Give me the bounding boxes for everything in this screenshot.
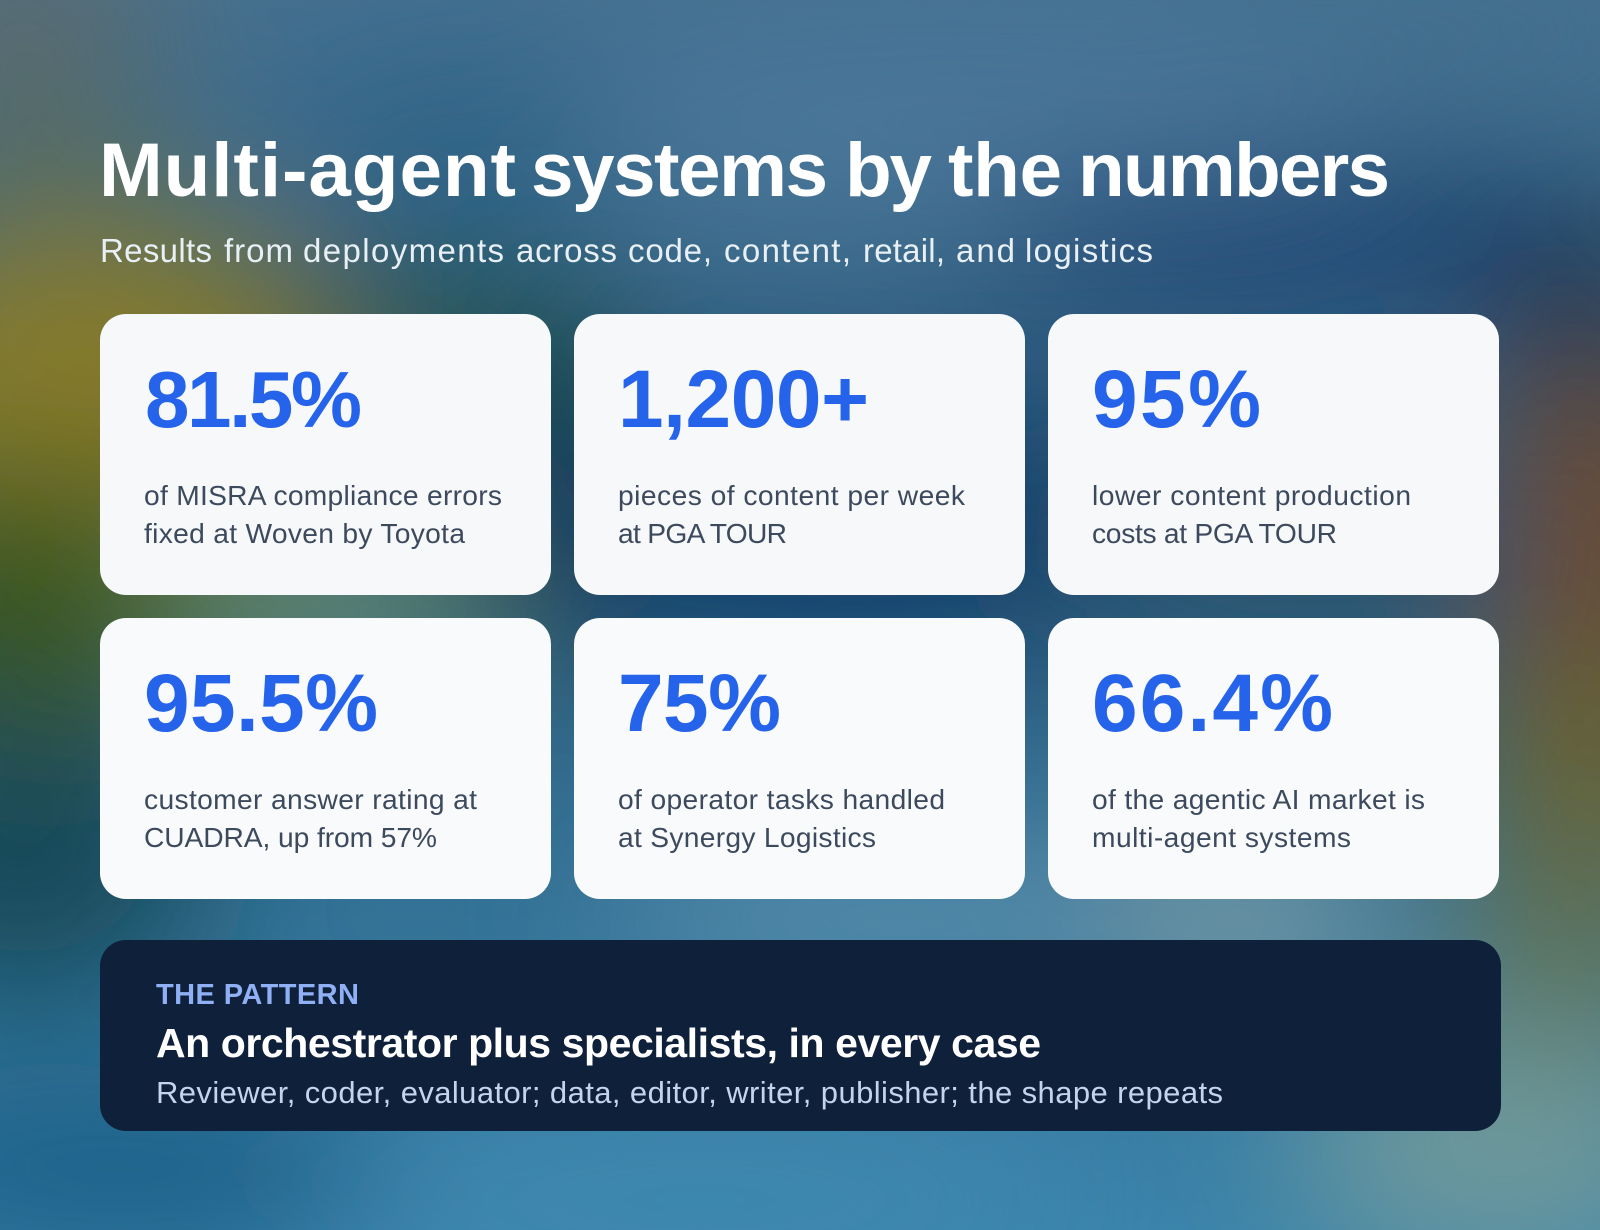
callout heading: An orchestrator plus specialists, in every case	[156, 1020, 1041, 1066]
description: operator tasks: at Synergy Logistics	[618, 821, 876, 853]
title: the	[948, 128, 1062, 213]
stat: 81.5%: 81.5%	[145, 355, 362, 444]
callout body: Reviewer, coder, evaluator; data, editor, writer, publisher; the shape repeats	[156, 1075, 1223, 1110]
description: operator tasks: of operator tasks handled	[618, 783, 945, 815]
panel: the pattern callout	[100, 940, 1501, 1131]
subtitle: deployments	[303, 232, 504, 269]
subtitle: and	[956, 232, 1015, 269]
callout label: THE PATTERN	[156, 979, 359, 1011]
title: numbers	[1078, 128, 1390, 213]
description: market share: of the agentic AI market is	[1092, 783, 1425, 815]
subtitle: across	[516, 232, 617, 269]
subtitle: logistics	[1025, 232, 1153, 269]
description: MISRA: of MISRA compliance errors	[144, 479, 502, 511]
panel: market share stat card	[1048, 618, 1499, 899]
description: customer rating: CUADRA, up from 57%	[144, 821, 437, 853]
panel: operator tasks stat card	[574, 618, 1025, 899]
panel: MISRA stat card	[100, 314, 551, 595]
description: customer rating: customer answer rating at	[144, 783, 477, 815]
description: content volume: at PGA TOUR	[618, 517, 787, 549]
panel: production cost stat card	[1048, 314, 1499, 595]
subtitle: code,	[628, 232, 712, 269]
stat: 66.4%: 66.4%	[1092, 658, 1333, 749]
panel: content volume stat card	[574, 314, 1025, 595]
subtitle: Results	[100, 232, 212, 269]
title: systems	[531, 128, 828, 213]
title: Multi-agent	[99, 128, 516, 213]
title: by	[845, 128, 932, 213]
subtitle: retail,	[863, 232, 945, 269]
description: market share: multi-agent systems	[1092, 821, 1351, 853]
description: MISRA: fixed at Woven by Toyota	[144, 517, 465, 549]
stat: 95%: 95%	[1092, 354, 1261, 445]
description: production cost: lower content production	[1092, 479, 1411, 511]
stat: 95.5%: 95.5%	[144, 658, 378, 749]
subtitle: content,	[724, 232, 851, 269]
panel: customer rating stat card	[100, 618, 551, 899]
stat: 75%: 75%	[618, 658, 781, 749]
stat: 1,200+: 1,200+	[618, 354, 869, 445]
subtitle: from	[224, 232, 293, 269]
description: production cost: costs at PGA TOUR	[1092, 517, 1337, 549]
description: content volume: pieces of content per week	[618, 479, 966, 511]
